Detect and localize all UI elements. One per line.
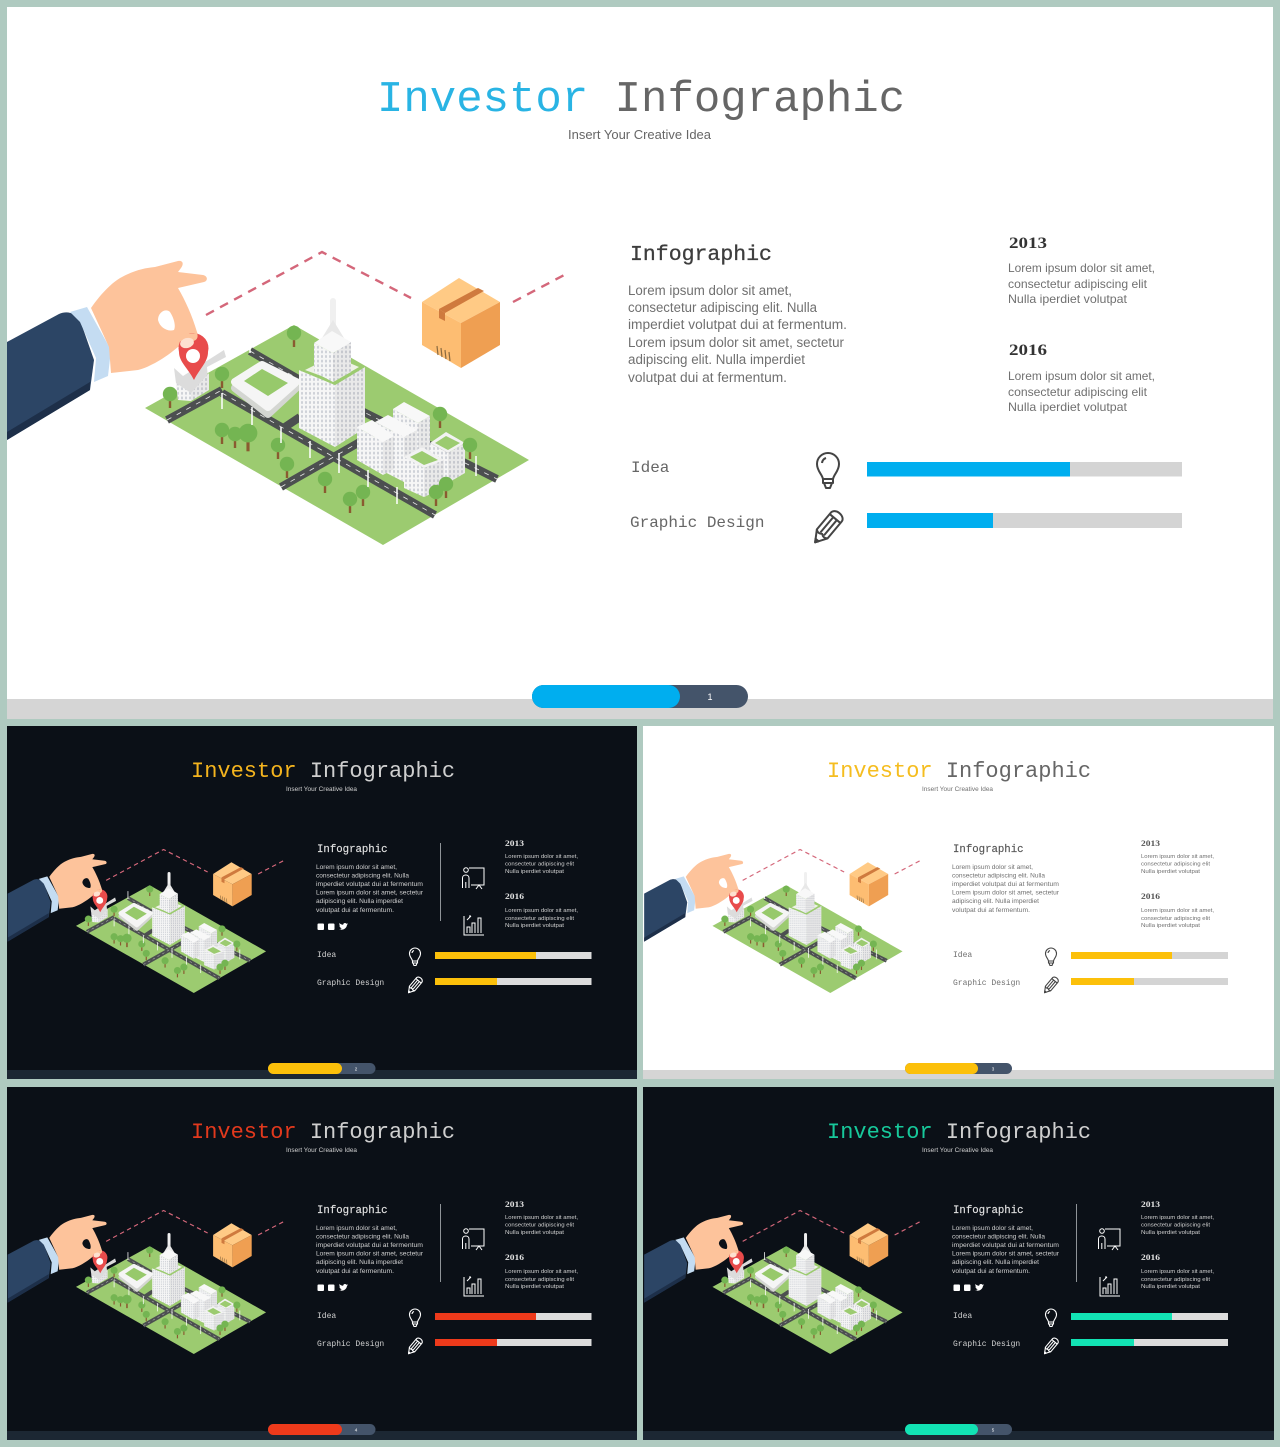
label Graphic Design: Graphic Design xyxy=(317,1340,384,1349)
body text: volutpat dui at fermentum. xyxy=(316,907,394,914)
year block 2013: Nulla iperdiet volutpat xyxy=(505,1230,564,1236)
text block: body paragraph: adipiscing elit. Nulla imperdiet xyxy=(628,352,805,367)
icon bulb xyxy=(410,948,420,966)
heading: Infographic: Infographic xyxy=(630,243,772,267)
title: Investor Infographic xyxy=(191,759,455,784)
icon: pencil xyxy=(810,509,845,547)
label Graphic Design: Graphic Design xyxy=(317,979,384,988)
body text: imperdiet volutpat dui at fermentum xyxy=(316,881,424,888)
body text: imperdiet volutpat dui at fermentum xyxy=(316,1242,424,1249)
year block 2016: Lorem ipsum dolor sit amet, xyxy=(505,908,578,914)
label Graphic Design: Graphic Design xyxy=(953,1340,1020,1349)
title: Investor Infographic xyxy=(827,759,1091,784)
body text: volutpat dui at fermentum. xyxy=(952,1268,1030,1275)
year block: 2016: consectetur adipiscing elit xyxy=(1008,385,1148,399)
year block 2013 xyxy=(1141,1200,1214,1236)
body text: consectetur adipiscing elit. Nulla xyxy=(316,872,409,880)
bar: Idea xyxy=(867,462,1182,476)
year block 2016: consectetur adipiscing elit xyxy=(505,1277,574,1283)
page pill: 3 xyxy=(992,1066,995,1072)
subtitle: Insert Your Creative Idea xyxy=(568,127,712,142)
icon bulb xyxy=(410,1309,420,1326)
year block 2013: Lorem ipsum dolor sit amet, xyxy=(1141,1215,1214,1221)
body text: imperdiet volutpat dui at fermentum xyxy=(952,1242,1060,1249)
page pill xyxy=(905,1063,1012,1074)
text block: body paragraph: imperdiet volutpat dui at fermentum. xyxy=(628,317,847,332)
illustration xyxy=(644,1210,922,1354)
divider xyxy=(440,1204,441,1282)
year block: 2016: Nulla iperdiet volutpat xyxy=(1008,400,1128,414)
year block 2013: consectetur adipiscing elit xyxy=(1141,862,1210,868)
page pill xyxy=(532,685,748,708)
body text: Lorem ipsum dolor sit amet, xyxy=(316,1225,397,1232)
label Idea: Idea xyxy=(317,951,336,960)
text block: body paragraph: consectetur adipiscing elit. Nulla xyxy=(628,300,817,315)
icon: teacher xyxy=(462,1229,484,1250)
icon pencil xyxy=(406,1337,423,1356)
illustration: hand placing pin on isometric city with delivery box xyxy=(7,252,568,545)
year block 2016: 2016 xyxy=(1141,1253,1160,1262)
body text: Lorem ipsum dolor sit amet, xyxy=(316,864,397,871)
divider xyxy=(1076,1204,1077,1282)
subtitle: Insert Your Creative Idea xyxy=(286,786,357,793)
body text: volutpat dui at fermentum. xyxy=(952,907,1030,914)
year block 2013: Lorem ipsum dolor sit amet, xyxy=(1141,854,1214,860)
year block: 2013: consectetur adipiscing elit xyxy=(1008,277,1148,291)
panel: main white slide xyxy=(7,7,1273,719)
label: Idea: Idea xyxy=(631,459,670,477)
year block 2016 xyxy=(505,892,578,929)
year block 2016: 2016 xyxy=(1141,892,1160,901)
year block 2016: Lorem ipsum dolor sit amet, xyxy=(1141,1269,1214,1275)
year block 2016 xyxy=(505,1253,578,1290)
year block 2016: Nulla iperdiet volutpat xyxy=(505,1284,564,1290)
icon pencil xyxy=(1042,976,1059,995)
heading: Infographic xyxy=(953,844,1024,856)
page pill xyxy=(268,1063,376,1074)
year block 2013: consectetur adipiscing elit xyxy=(505,1222,574,1228)
panel: dark slide, red theme xyxy=(7,1087,637,1440)
divider xyxy=(440,843,441,921)
body text: consectetur adipiscing elit. Nulla xyxy=(952,1234,1045,1240)
body text: adipiscing elit. Nulla imperdiet xyxy=(316,898,403,905)
heading: Infographic xyxy=(317,844,388,856)
year block: 2016: Lorem ipsum dolor sit amet, xyxy=(1008,369,1155,383)
subtitle: Insert Your Creative Idea xyxy=(922,1147,993,1154)
bar Graphic Design xyxy=(435,1339,592,1346)
body text: imperdiet volutpat dui at fermentum xyxy=(952,881,1060,888)
bar Idea xyxy=(1071,952,1228,959)
label Idea: Idea xyxy=(317,1312,336,1321)
subtitle: Insert Your Creative Idea xyxy=(286,1147,357,1154)
body text: consectetur adipiscing elit. Nulla xyxy=(952,872,1045,880)
body text: consectetur adipiscing elit. Nulla xyxy=(316,1234,409,1240)
year block 2016 xyxy=(1141,892,1214,929)
icon bulb xyxy=(1046,948,1056,966)
year block 2016: consectetur adipiscing elit xyxy=(505,916,574,922)
year block: 2013: 2013 xyxy=(1009,235,1047,252)
social icons xyxy=(954,1284,984,1291)
year block 2013: 2013 xyxy=(505,839,524,848)
body text: adipiscing elit. Nulla imperdiet xyxy=(316,1259,403,1266)
subtitle: Insert Your Creative Idea xyxy=(922,786,993,793)
year block 2016: Lorem ipsum dolor sit amet, xyxy=(505,1269,578,1275)
year block 2016: consectetur adipiscing elit xyxy=(1141,916,1210,922)
bar Graphic Design xyxy=(1071,1339,1228,1346)
year block 2016 xyxy=(1141,1253,1214,1290)
year block 2013: Nulla iperdiet volutpat xyxy=(1141,869,1200,875)
year block 2013 xyxy=(505,839,578,875)
text block: body paragraph: Lorem ipsum dolor sit amet, sectetur xyxy=(628,335,844,350)
body text xyxy=(316,1225,424,1275)
body text xyxy=(952,1225,1060,1275)
page pill xyxy=(905,1424,1012,1435)
bar: Graphic Design xyxy=(867,513,1182,528)
label Graphic Design: Graphic Design xyxy=(953,979,1020,988)
body text xyxy=(316,864,424,914)
label Idea: Idea xyxy=(953,951,972,960)
body text: Lorem ipsum dolor sit amet, sectetur xyxy=(952,1250,1060,1258)
panel: dark slide, teal theme xyxy=(643,1087,1274,1440)
icon: growth chart xyxy=(1100,1277,1120,1296)
footer band xyxy=(7,699,1273,719)
body text: Lorem ipsum dolor sit amet, sectetur xyxy=(952,890,1060,896)
social icons xyxy=(318,1284,348,1291)
text block: body paragraph: Lorem ipsum dolor sit amet, xyxy=(628,283,792,298)
year block 2016: consectetur adipiscing elit xyxy=(1141,1277,1210,1283)
year block 2016: Lorem ipsum dolor sit amet, xyxy=(1141,908,1214,914)
year block: 2013: Lorem ipsum dolor sit amet, xyxy=(1008,261,1155,275)
page pill: 5 xyxy=(992,1428,995,1432)
icon: light bulb xyxy=(817,453,839,488)
illustration xyxy=(644,849,922,993)
body text: Lorem ipsum dolor sit amet, sectetur xyxy=(316,890,424,896)
panel: dark slide, yellow theme xyxy=(7,726,637,1079)
year block: 2016: 2016 xyxy=(1009,342,1047,359)
icon: teacher xyxy=(1098,1229,1120,1250)
year block 2016: 2016 xyxy=(505,892,524,901)
icon: teacher xyxy=(462,868,484,889)
bar Idea xyxy=(1071,1313,1228,1320)
year block 2013: consectetur adipiscing elit xyxy=(505,862,574,868)
heading: Infographic xyxy=(317,1205,388,1217)
panel: white slide, yellow theme xyxy=(643,726,1274,1079)
body text: adipiscing elit. Nulla imperdiet xyxy=(952,1259,1039,1266)
bar Graphic Design xyxy=(1071,978,1228,985)
body text: Lorem ipsum dolor sit amet, sectetur xyxy=(316,1250,424,1258)
year block 2013: 2013 xyxy=(505,1200,524,1209)
label Idea: Idea xyxy=(953,1312,972,1321)
social icons xyxy=(318,923,348,930)
year block 2016: 2016 xyxy=(505,1253,524,1262)
year block 2013: Lorem ipsum dolor sit amet, xyxy=(505,1215,578,1221)
icon pencil xyxy=(406,976,423,995)
icon: growth chart xyxy=(464,1277,484,1296)
year block 2013: 2013 xyxy=(1141,839,1160,848)
year block 2013 xyxy=(1141,839,1214,875)
bar Idea xyxy=(435,1313,592,1320)
text block: body paragraph xyxy=(628,283,847,385)
year block 2013: consectetur adipiscing elit xyxy=(1141,1222,1210,1228)
year block 2013 xyxy=(505,1200,578,1236)
title: Investor Infographic xyxy=(377,75,905,125)
year block: 2016 xyxy=(1008,342,1155,414)
bar Idea xyxy=(435,952,592,959)
year block 2016: Nulla iperdiet volutpat xyxy=(505,923,564,929)
icon pencil xyxy=(1042,1337,1059,1356)
year block 2016: Nulla iperdiet volutpat xyxy=(1141,1284,1200,1290)
label: Graphic Design: Graphic Design xyxy=(630,514,764,532)
illustration xyxy=(8,1210,285,1354)
body text: adipiscing elit. Nulla imperdiet xyxy=(952,898,1039,905)
body text: Lorem ipsum dolor sit amet, xyxy=(952,864,1033,871)
year block: 2013 xyxy=(1008,235,1155,306)
title: Investor Infographic xyxy=(827,1120,1091,1145)
title: Investor Infographic xyxy=(191,1120,455,1145)
icon bulb xyxy=(1046,1309,1056,1326)
body text: Lorem ipsum dolor sit amet, xyxy=(952,1225,1033,1232)
year block 2016: Nulla iperdiet volutpat xyxy=(1141,923,1200,929)
illustration xyxy=(8,849,285,993)
bar Graphic Design xyxy=(435,978,592,985)
heading: Infographic xyxy=(953,1205,1024,1217)
body text: volutpat dui at fermentum. xyxy=(316,1268,394,1275)
body text xyxy=(952,864,1060,914)
page pill: 2 xyxy=(355,1066,358,1072)
year block 2013: 2013 xyxy=(1141,1200,1160,1209)
year block 2013: Lorem ipsum dolor sit amet, xyxy=(505,854,578,860)
year block 2013: Nulla iperdiet volutpat xyxy=(505,869,564,875)
text block: body paragraph: volutpat dui at fermentum. xyxy=(628,370,787,385)
year block 2013: Nulla iperdiet volutpat xyxy=(1141,1230,1200,1236)
icon: growth chart xyxy=(464,916,484,935)
year block: 2013: Nulla iperdiet volutpat xyxy=(1008,292,1128,306)
page pill: 1 xyxy=(707,692,713,702)
page pill xyxy=(268,1424,376,1435)
page pill: 4 xyxy=(355,1428,358,1432)
